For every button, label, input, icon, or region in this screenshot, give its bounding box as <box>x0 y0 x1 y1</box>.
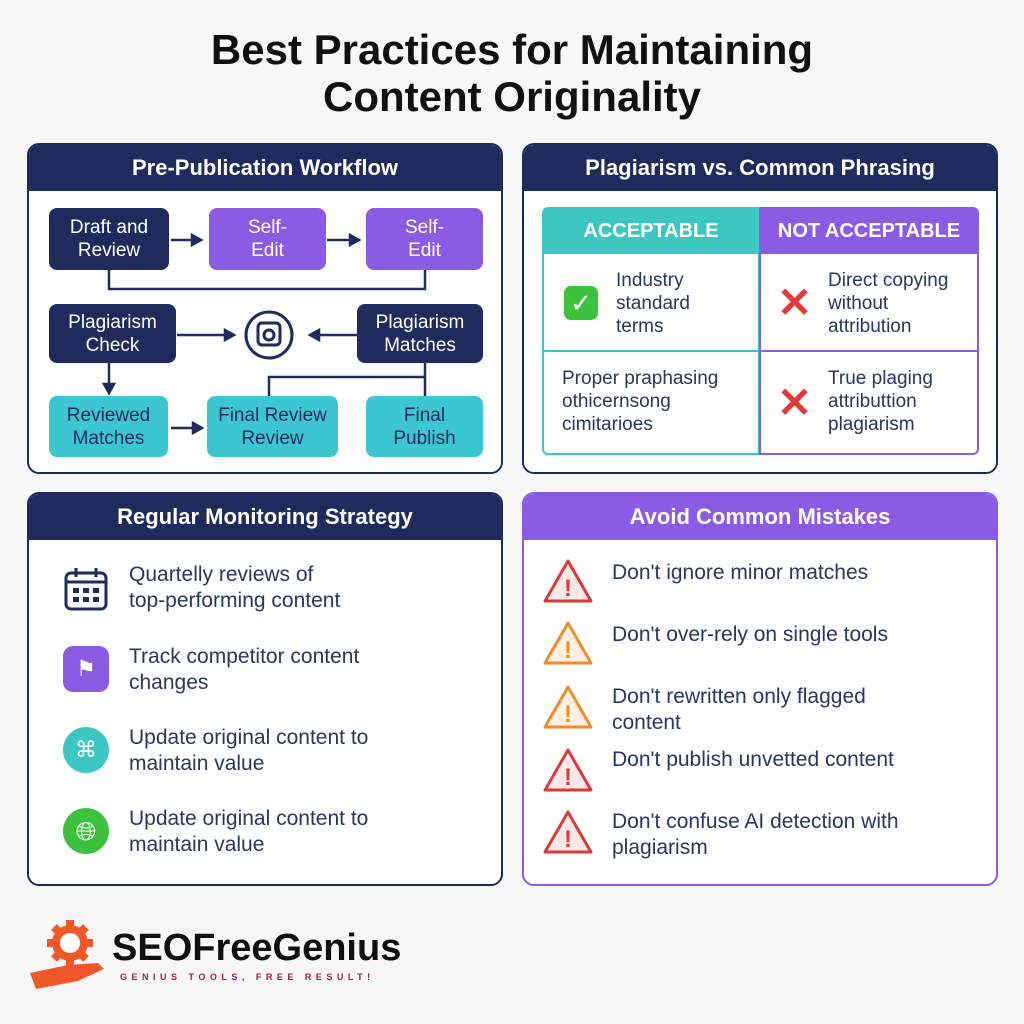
heading: plagiarism vs common phrasing <box>524 145 996 191</box>
box: final review: Review <box>241 428 304 448</box>
box: plagiarism matches <box>357 304 483 363</box>
item: update content: Update original content to <box>129 726 368 749</box>
box: plagiarism matches: Matches <box>384 334 456 356</box>
item: track competitor <box>63 645 360 694</box>
heading: workflow <box>29 145 501 191</box>
logo: SEOFreeGenius <box>112 927 401 969</box>
icon: check: ✓ <box>570 288 592 318</box>
box: plagiarism check: Check <box>86 334 139 356</box>
box: final publish: Final <box>404 404 445 426</box>
item: AI detection <box>544 810 899 859</box>
column: not acceptable: NOT ACCEPTABLE <box>778 220 960 242</box>
item: flagged content: content <box>612 711 681 734</box>
item: flagged content <box>544 685 866 734</box>
panel: pre-publication workflow <box>27 143 503 474</box>
column: acceptable: othicernsong <box>562 391 671 412</box>
heading: monitoring <box>29 494 501 540</box>
table <box>542 207 979 455</box>
item: unvetted: ! <box>564 764 572 791</box>
logo: GENIUS TOOLS, FREE RESULT! <box>120 972 375 982</box>
item: update content: ⌘ <box>75 737 97 762</box>
item: update content 2 <box>63 807 368 856</box>
logo <box>30 920 401 989</box>
box: self-edit 2: Self- <box>405 217 444 238</box>
icon: check <box>564 286 598 320</box>
box: final publish: Publish <box>393 428 456 448</box>
item: flagged content: Don't rewritten only flagged <box>612 685 866 708</box>
item: minor matches: Don't ignore minor matches <box>612 561 868 584</box>
box: reviewed matches: Reviewed <box>67 404 150 426</box>
box: self-edit 1: Self- <box>248 217 287 238</box>
icon: gear hand <box>30 920 104 989</box>
column: not acceptable: True plaging <box>828 368 933 389</box>
box: draft and review: Review <box>78 240 140 261</box>
box: reviewed matches: Matches <box>73 428 144 448</box>
item: AI detection: ! <box>564 826 572 853</box>
box: self-edit 1 <box>209 208 326 270</box>
box: self-edit 2: Edit <box>408 240 441 261</box>
box: draft and review: Draft and <box>70 217 148 238</box>
item: update content 2: Update original content to <box>129 807 368 830</box>
column: acceptable: ACCEPTABLE <box>583 220 719 242</box>
icon: cross: ✕ <box>777 379 812 426</box>
heading: monitoring: Regular Monitoring Strategy <box>117 504 413 529</box>
column: acceptable <box>542 207 760 455</box>
column: acceptable: Industry <box>616 270 684 291</box>
title: Content Originality <box>323 73 701 120</box>
column: acceptable: cimitarioes <box>562 414 653 435</box>
item: update content 2: 🌐︎ <box>76 816 96 846</box>
item: unvetted: Don't publish unvetted content <box>612 748 894 771</box>
item: minor matches <box>544 559 868 602</box>
item: update content <box>63 726 368 775</box>
box: draft and review <box>49 208 169 270</box>
item: track competitor: Track competitor content <box>129 645 359 668</box>
column: acceptable: Proper praphasing <box>562 368 718 389</box>
column: not acceptable: Direct copying <box>828 270 948 291</box>
box: plagiarism matches: Plagiarism <box>376 312 464 332</box>
column: not acceptable: plagiarism <box>828 414 915 435</box>
column: not acceptable <box>759 207 979 455</box>
column: acceptable: standard <box>616 293 690 314</box>
item: single tools: Don't over-rely on single tools <box>612 623 888 646</box>
box: final publish <box>366 396 483 457</box>
item: quarterly reviews: top-performing content <box>129 589 340 612</box>
box: reviewed matches <box>49 396 168 457</box>
column: acceptable: terms <box>616 316 664 337</box>
heading: mistakes <box>524 494 996 540</box>
item: minor matches: ! <box>564 575 572 602</box>
item: track competitor: changes <box>129 671 208 694</box>
panel: avoid common mistakes <box>522 492 998 886</box>
box: self-edit 1: Edit <box>251 240 284 261</box>
box: plagiarism check <box>49 304 176 363</box>
item: quarterly reviews: Quartelly reviews of <box>129 563 313 586</box>
title <box>211 26 813 120</box>
heading: plagiarism vs common phrasing: Plagiarism vs. Common Phrasing <box>585 155 935 180</box>
item: AI detection: Don't confuse AI detection with <box>612 810 899 833</box>
item: update content: maintain value <box>129 752 264 775</box>
title: Best Practices for Maintaining <box>211 26 813 73</box>
item: track competitor: ⚑ <box>76 656 96 681</box>
item: flagged content: ! <box>564 701 572 728</box>
item: update content 2: maintain value <box>129 833 264 856</box>
item: single tools: ! <box>564 637 572 664</box>
flow connectors <box>102 232 426 436</box>
column: not acceptable: attribution <box>828 316 911 337</box>
box: final review <box>207 396 338 457</box>
panel: regular monitoring <box>27 492 503 886</box>
box: final review: Final Review <box>218 404 327 426</box>
icon: cross: ✕ <box>777 279 812 326</box>
heading: workflow: Pre-Publication Workflow <box>132 155 398 180</box>
item: unvetted <box>544 748 894 792</box>
item: single tools <box>544 621 888 664</box>
heading: mistakes: Avoid Common Mistakes <box>630 504 890 529</box>
column: not acceptable: without <box>828 293 888 314</box>
box: plagiarism check: Plagiarism <box>68 312 157 332</box>
item: quarterly reviews <box>64 563 340 612</box>
panel: plagiarism vs common phrasing <box>522 143 998 474</box>
box: self-edit 2 <box>366 208 483 270</box>
item: AI detection: plagiarism <box>612 836 708 859</box>
column: not acceptable: attributtion <box>828 391 917 412</box>
